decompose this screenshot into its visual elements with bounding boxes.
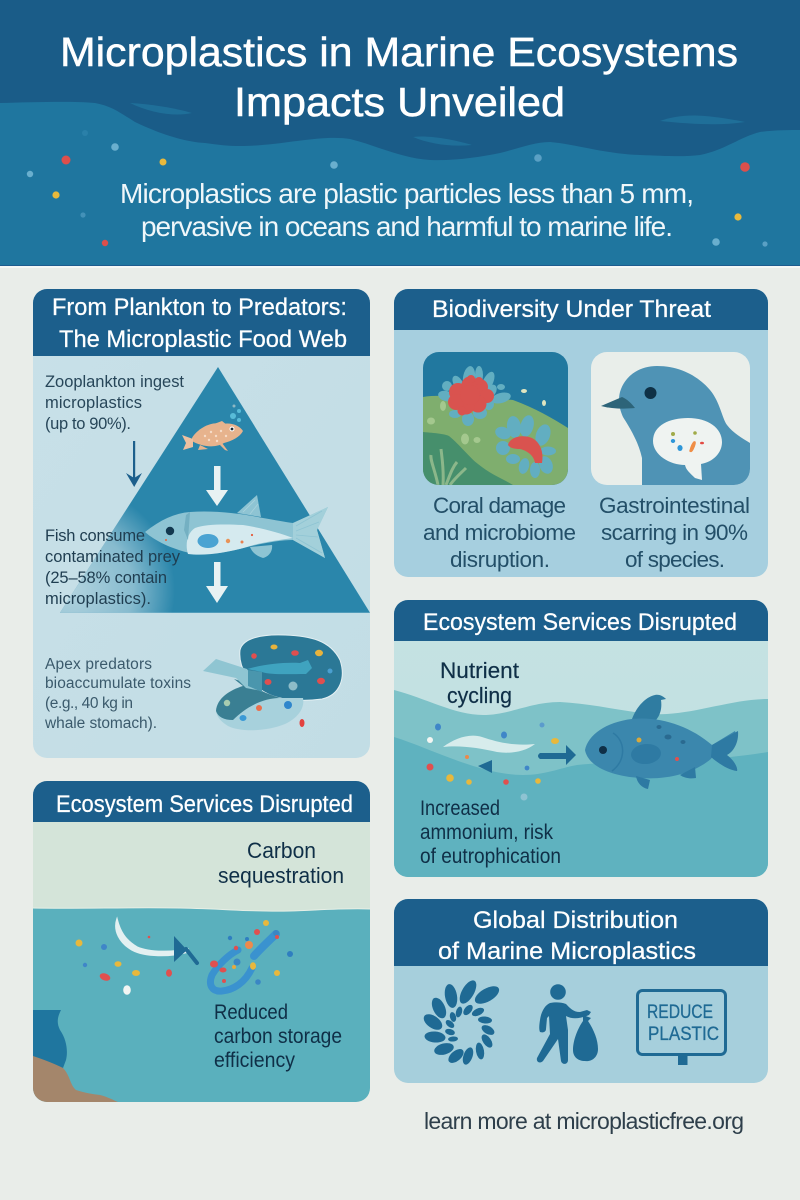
- panel: ecosystem services carbon sequestration: [33, 781, 370, 1102]
- footer link text: learn more at microplasticfree.org: [424, 1108, 744, 1134]
- caption: gastrointestinal scarring: [599, 493, 750, 572]
- icon: coral damage: [423, 352, 568, 485]
- panel: ecosystem services nutrient cycling: [394, 600, 768, 877]
- label: nutrient cycling: Nutrient: [440, 658, 519, 683]
- title: Impacts Unveiled: [234, 79, 565, 125]
- label: increased ammonium: Increased: [420, 797, 500, 820]
- text: fish consume: (25–58% contain: [45, 569, 167, 587]
- icon: contaminated fish: [145, 495, 328, 558]
- text: fish consume: [45, 527, 181, 608]
- caption: coral damage: Coral damage: [433, 493, 566, 518]
- caption: coral damage: [423, 493, 576, 572]
- plastic debris cluster: [210, 920, 293, 991]
- text: fish consume: microplastics).: [45, 590, 151, 608]
- caption: gastrointestinal scarring: scarring in 90%: [601, 520, 748, 545]
- subtitle: [120, 178, 694, 242]
- icon: leaf spiral: [421, 978, 502, 1066]
- panel: global distribution: [394, 899, 768, 1083]
- plastic particles and streak: [426, 722, 559, 800]
- arrow: down to fish: [206, 466, 228, 506]
- panel: biodiversity under threat: [394, 289, 768, 577]
- panel heading: [33, 289, 370, 356]
- text: fish consume: Fish consume: [45, 527, 145, 545]
- microplastic particles: [27, 130, 768, 247]
- food web pyramid: [40, 367, 370, 615]
- panel heading: [394, 289, 768, 330]
- panel heading: [394, 899, 768, 966]
- panel heading: Ecosystem Services Disrupted: [56, 791, 353, 818]
- text: zooplankton: (up to 90%).: [45, 415, 131, 433]
- icon: reduce plastic sign: PLASTIC: [648, 1024, 719, 1045]
- rock seabed: [33, 1010, 118, 1102]
- text: apex predators: (e.g., 40 kg in: [45, 695, 133, 712]
- text: fish consume: contaminated prey: [45, 548, 181, 566]
- panel heading: of Marine Microplastics: [438, 938, 696, 965]
- panel: plankton to predators food web: [33, 289, 370, 758]
- label: reduced carbon storage: [214, 1001, 342, 1072]
- label: nutrient cycling: [440, 658, 519, 708]
- caption: gastrointestinal scarring: Gastrointestinal: [599, 493, 750, 518]
- icon: bird: [591, 352, 750, 485]
- label: carbon sequestration: [218, 842, 343, 888]
- text: apex predators: bioaccumulate toxins: [45, 675, 191, 692]
- title: Microplastics in Marine Ecosystems: [60, 29, 738, 75]
- caption: gastrointestinal scarring: of species.: [625, 547, 725, 572]
- panel heading: Biodiversity Under Threat: [432, 296, 711, 323]
- label: carbon sequestration: Carbon: [247, 838, 316, 863]
- subtitle: Microplastics are plastic particles less than 5 mm,: [120, 178, 694, 209]
- text: zooplankton: [45, 373, 184, 433]
- panel heading: From Plankton to Predators:: [52, 294, 347, 321]
- panel heading: Ecosystem Services Disrupted: [423, 609, 737, 636]
- text: zooplankton: microplastics: [45, 394, 142, 412]
- text: apex predators: Apex predators: [45, 656, 152, 673]
- panel heading: The Microplastic Food Web: [59, 326, 347, 353]
- panel heading: [33, 781, 370, 822]
- label: reduced carbon storage: carbon storage: [214, 1025, 342, 1048]
- header banner: [0, 0, 800, 268]
- plastic particles and arrow: [76, 919, 197, 995]
- label: nutrient cycling: cycling: [447, 683, 512, 708]
- label: reduced carbon storage: efficiency: [214, 1049, 295, 1072]
- title: [60, 29, 738, 125]
- label: increased ammonium: of eutrophication: [420, 845, 561, 868]
- icon: whale stomach with plastics: [203, 635, 342, 730]
- text: apex predators: whale stomach).: [44, 715, 157, 732]
- label: reduced carbon storage: Reduced: [214, 1001, 288, 1024]
- icon: person with trash bag: [537, 984, 598, 1064]
- icon: reduce plastic sign: [638, 990, 726, 1065]
- icon: dark arrow: [126, 441, 142, 487]
- panel heading: [394, 600, 768, 641]
- arrow: down to predators: [206, 562, 228, 603]
- text: zooplankton: Zooplankton ingest: [45, 373, 184, 391]
- label: increased ammonium: [420, 797, 561, 868]
- text: apex predators: [44, 656, 191, 732]
- label: increased ammonium: ammonium, risk: [420, 821, 553, 844]
- subtitle: pervasive in oceans and harmful to marine life.: [141, 211, 673, 242]
- caption: coral damage: disruption.: [450, 547, 550, 572]
- arrow: to fish: [538, 745, 576, 765]
- icon: fish: [585, 695, 738, 789]
- panel heading: Global Distribution: [473, 907, 678, 934]
- label: carbon sequestration: sequestration: [218, 863, 344, 888]
- icon: reduce plastic sign: REDUCE: [647, 1002, 713, 1023]
- icon: zooplankton fish: [182, 404, 243, 451]
- caption: coral damage: and microbiome: [423, 520, 576, 545]
